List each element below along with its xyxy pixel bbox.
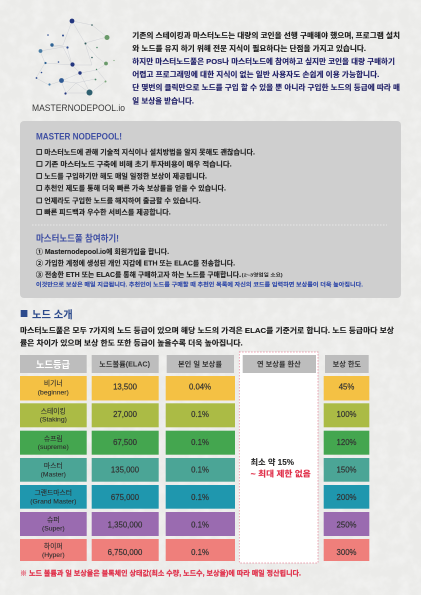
joining steps bbox=[36, 247, 283, 279]
benefits checklist: ☐ 노드를 구입하기만 해도 매일 일정한 보상이 제공됩니다. bbox=[36, 172, 207, 180]
table header row: 본인 일 보상률 bbox=[178, 360, 223, 368]
row: beginner: 13,500 bbox=[113, 382, 138, 392]
row: hyper: 하이퍼 bbox=[44, 542, 63, 550]
row: super bbox=[20, 512, 369, 536]
row: supreme: 슈프림 bbox=[44, 435, 63, 443]
row: master: 마스터 bbox=[44, 461, 63, 470]
joining steps: ③ 전송한 ETH 또는 ELAC를 통해 구매하고자 하는 노드를 구매합니다. bbox=[36, 270, 241, 279]
row: super: 250% bbox=[337, 520, 357, 529]
table header row: 보상 한도 bbox=[333, 360, 362, 368]
row: master: 135,000 bbox=[111, 466, 140, 474]
joining steps: ② 가입한 계정에 생성된 개인 지갑에 ETH 또는 ELAC를 전송합니다. bbox=[36, 259, 235, 268]
row: hyper: (Hyper) bbox=[42, 552, 65, 559]
row: master: (Master) bbox=[41, 472, 66, 478]
row: hyper: 6,750,000 bbox=[108, 548, 143, 557]
intro text block bbox=[132, 31, 400, 106]
section description: 률은 차이가 있으며 보상 한도 또한 등급이 높을수록 더욱 높아집니다. bbox=[20, 339, 243, 348]
annual reward callout: 최소 약 15% bbox=[251, 457, 294, 467]
row: grand master bbox=[20, 485, 369, 509]
row: beginner: (beginner) bbox=[38, 390, 69, 396]
row: master: 0.1% bbox=[191, 466, 209, 474]
row: super: 슈퍼 bbox=[47, 515, 60, 524]
table header row: 노드등급 bbox=[36, 360, 70, 371]
panel: master nodepool benefits and how to join bbox=[20, 121, 401, 298]
joining steps: (2~3영업일 소요) bbox=[242, 272, 283, 278]
intro text block: 일 보상을 받습니다. bbox=[132, 96, 194, 106]
row: staking: (Staking) bbox=[40, 416, 67, 424]
row: grand master: 200% bbox=[337, 493, 357, 502]
table header row: 노드볼륨(ELAC) bbox=[99, 360, 150, 368]
row: staking: 0.1% bbox=[191, 410, 209, 419]
heading: how to join: 마스터노드풀 참여하기! bbox=[36, 232, 119, 244]
row: supreme: 0.1% bbox=[191, 438, 209, 447]
row: super: 0.1% bbox=[191, 520, 209, 529]
row: staking bbox=[20, 403, 369, 427]
intro text block: 와 노드를 유지 하기 위해 전문 지식이 필요하다는 단점을 가지고 있습니다. bbox=[132, 44, 366, 53]
intro text block: 기존의 스테이킹과 마스터노드는 대량의 코인을 선행 구매해야 했으며, 프로그램 설치 bbox=[132, 31, 400, 40]
benefits checklist: ☐ 마스터노드에 관해 기술적 지식이나 설치방법을 알지 못해도 괜찮습니다. bbox=[36, 148, 255, 156]
row: staking: 27,000 bbox=[113, 410, 138, 419]
row: beginner: 45% bbox=[339, 382, 354, 392]
row: hyper bbox=[20, 539, 369, 561]
row: supreme: 120% bbox=[337, 438, 357, 447]
section description: 마스터노드풀은 모두 7가지의 노드 등급이 있으며 해당 노드의 가격은 ELAC를 기준거로 합니다. 노드 등급마다 보상 bbox=[20, 326, 394, 335]
row: hyper: 0.1% bbox=[191, 548, 209, 557]
row: master: 150% bbox=[337, 466, 357, 474]
table: node tiers bbox=[20, 352, 369, 563]
row: staking: 100% bbox=[337, 410, 357, 419]
heading: MASTER NODEPOOL: MASTER NODEPOOL! bbox=[36, 132, 122, 142]
benefits checklist: ☐ 추천인 제도를 통해 더욱 빠른 가속 보상률을 얻을 수 있습니다. bbox=[36, 184, 226, 192]
row: super: 1,350,000 bbox=[108, 520, 143, 529]
table header row: 연 보상률 환산 bbox=[257, 360, 301, 368]
row: staking: 스테이킹 bbox=[41, 406, 66, 416]
annual reward callout bbox=[251, 457, 311, 478]
section heading: node introduction: 노드 소개 bbox=[32, 308, 73, 321]
benefits checklist: ☐ 기존 마스터노드 구축에 비해 초기 투자비용이 매우 적습니다. bbox=[36, 160, 232, 168]
annual reward callout: ~ 최대 제한 없음 bbox=[251, 468, 311, 478]
logo: network of nodes bbox=[32, 19, 125, 114]
intro text block: 단 몇번의 클릭만으로 노드를 구입 할 수 있을 뿐 아니라 구입한 노드의 등급에 따라 매 bbox=[132, 83, 400, 92]
row: grand master: 0.1% bbox=[191, 493, 209, 502]
benefits checklist bbox=[36, 148, 255, 216]
row: supreme: (supreme) bbox=[38, 444, 69, 451]
row: hyper: 300% bbox=[337, 548, 357, 557]
row: beginner bbox=[20, 376, 369, 400]
table header row bbox=[20, 355, 369, 373]
row: beginner: 0.04% bbox=[189, 382, 211, 392]
footnote: ※ 노드 볼륨과 일 보상율은 블록체인 상태값(최소 수량, 노드수, 보상율)에 따라 매일 정산됩니다. bbox=[20, 568, 301, 578]
row: grand master: 그랜드마스터 bbox=[35, 488, 72, 497]
logo wordmark: MASTERNODEPOOL.io bbox=[32, 103, 125, 114]
joining steps: ① Masternodepool.io에 회원가입을 합니다. bbox=[36, 247, 169, 256]
row: supreme: 67,500 bbox=[113, 438, 138, 447]
row: super: (Super) bbox=[42, 526, 65, 532]
row: supreme bbox=[20, 431, 369, 455]
intro text block: 하지만 마스터노드풀은 POS나 마스터노드에 참여하고 싶지만 코인을 대량 구매하기 bbox=[132, 57, 395, 66]
row: grand master: 675,000 bbox=[111, 493, 140, 502]
row: master bbox=[20, 458, 369, 482]
benefits checklist: ☐ 언제라도 구입한 노드를 해지하여 출금할 수 있습니다. bbox=[36, 196, 201, 205]
row: grand master: (Grand Master) bbox=[30, 498, 76, 506]
row: beginner: 비기너 bbox=[44, 378, 63, 388]
section description bbox=[20, 326, 394, 348]
blue note: 이것만으로 보상은 매일 지급됩니다. 추천인이 노드를 구매할 때 추천인 목록에 자신의 코드를 입력하면 보상률이 더욱 높아집니다. bbox=[36, 280, 363, 288]
intro text block: 어렵고 프로그래밍에 대한 지식이 없는 일반 사용자도 손쉽게 이용 가능합니다. bbox=[132, 70, 379, 79]
benefits checklist: ☐ 빠른 피드백과 우수한 서비스를 제공합니다. bbox=[36, 208, 171, 216]
